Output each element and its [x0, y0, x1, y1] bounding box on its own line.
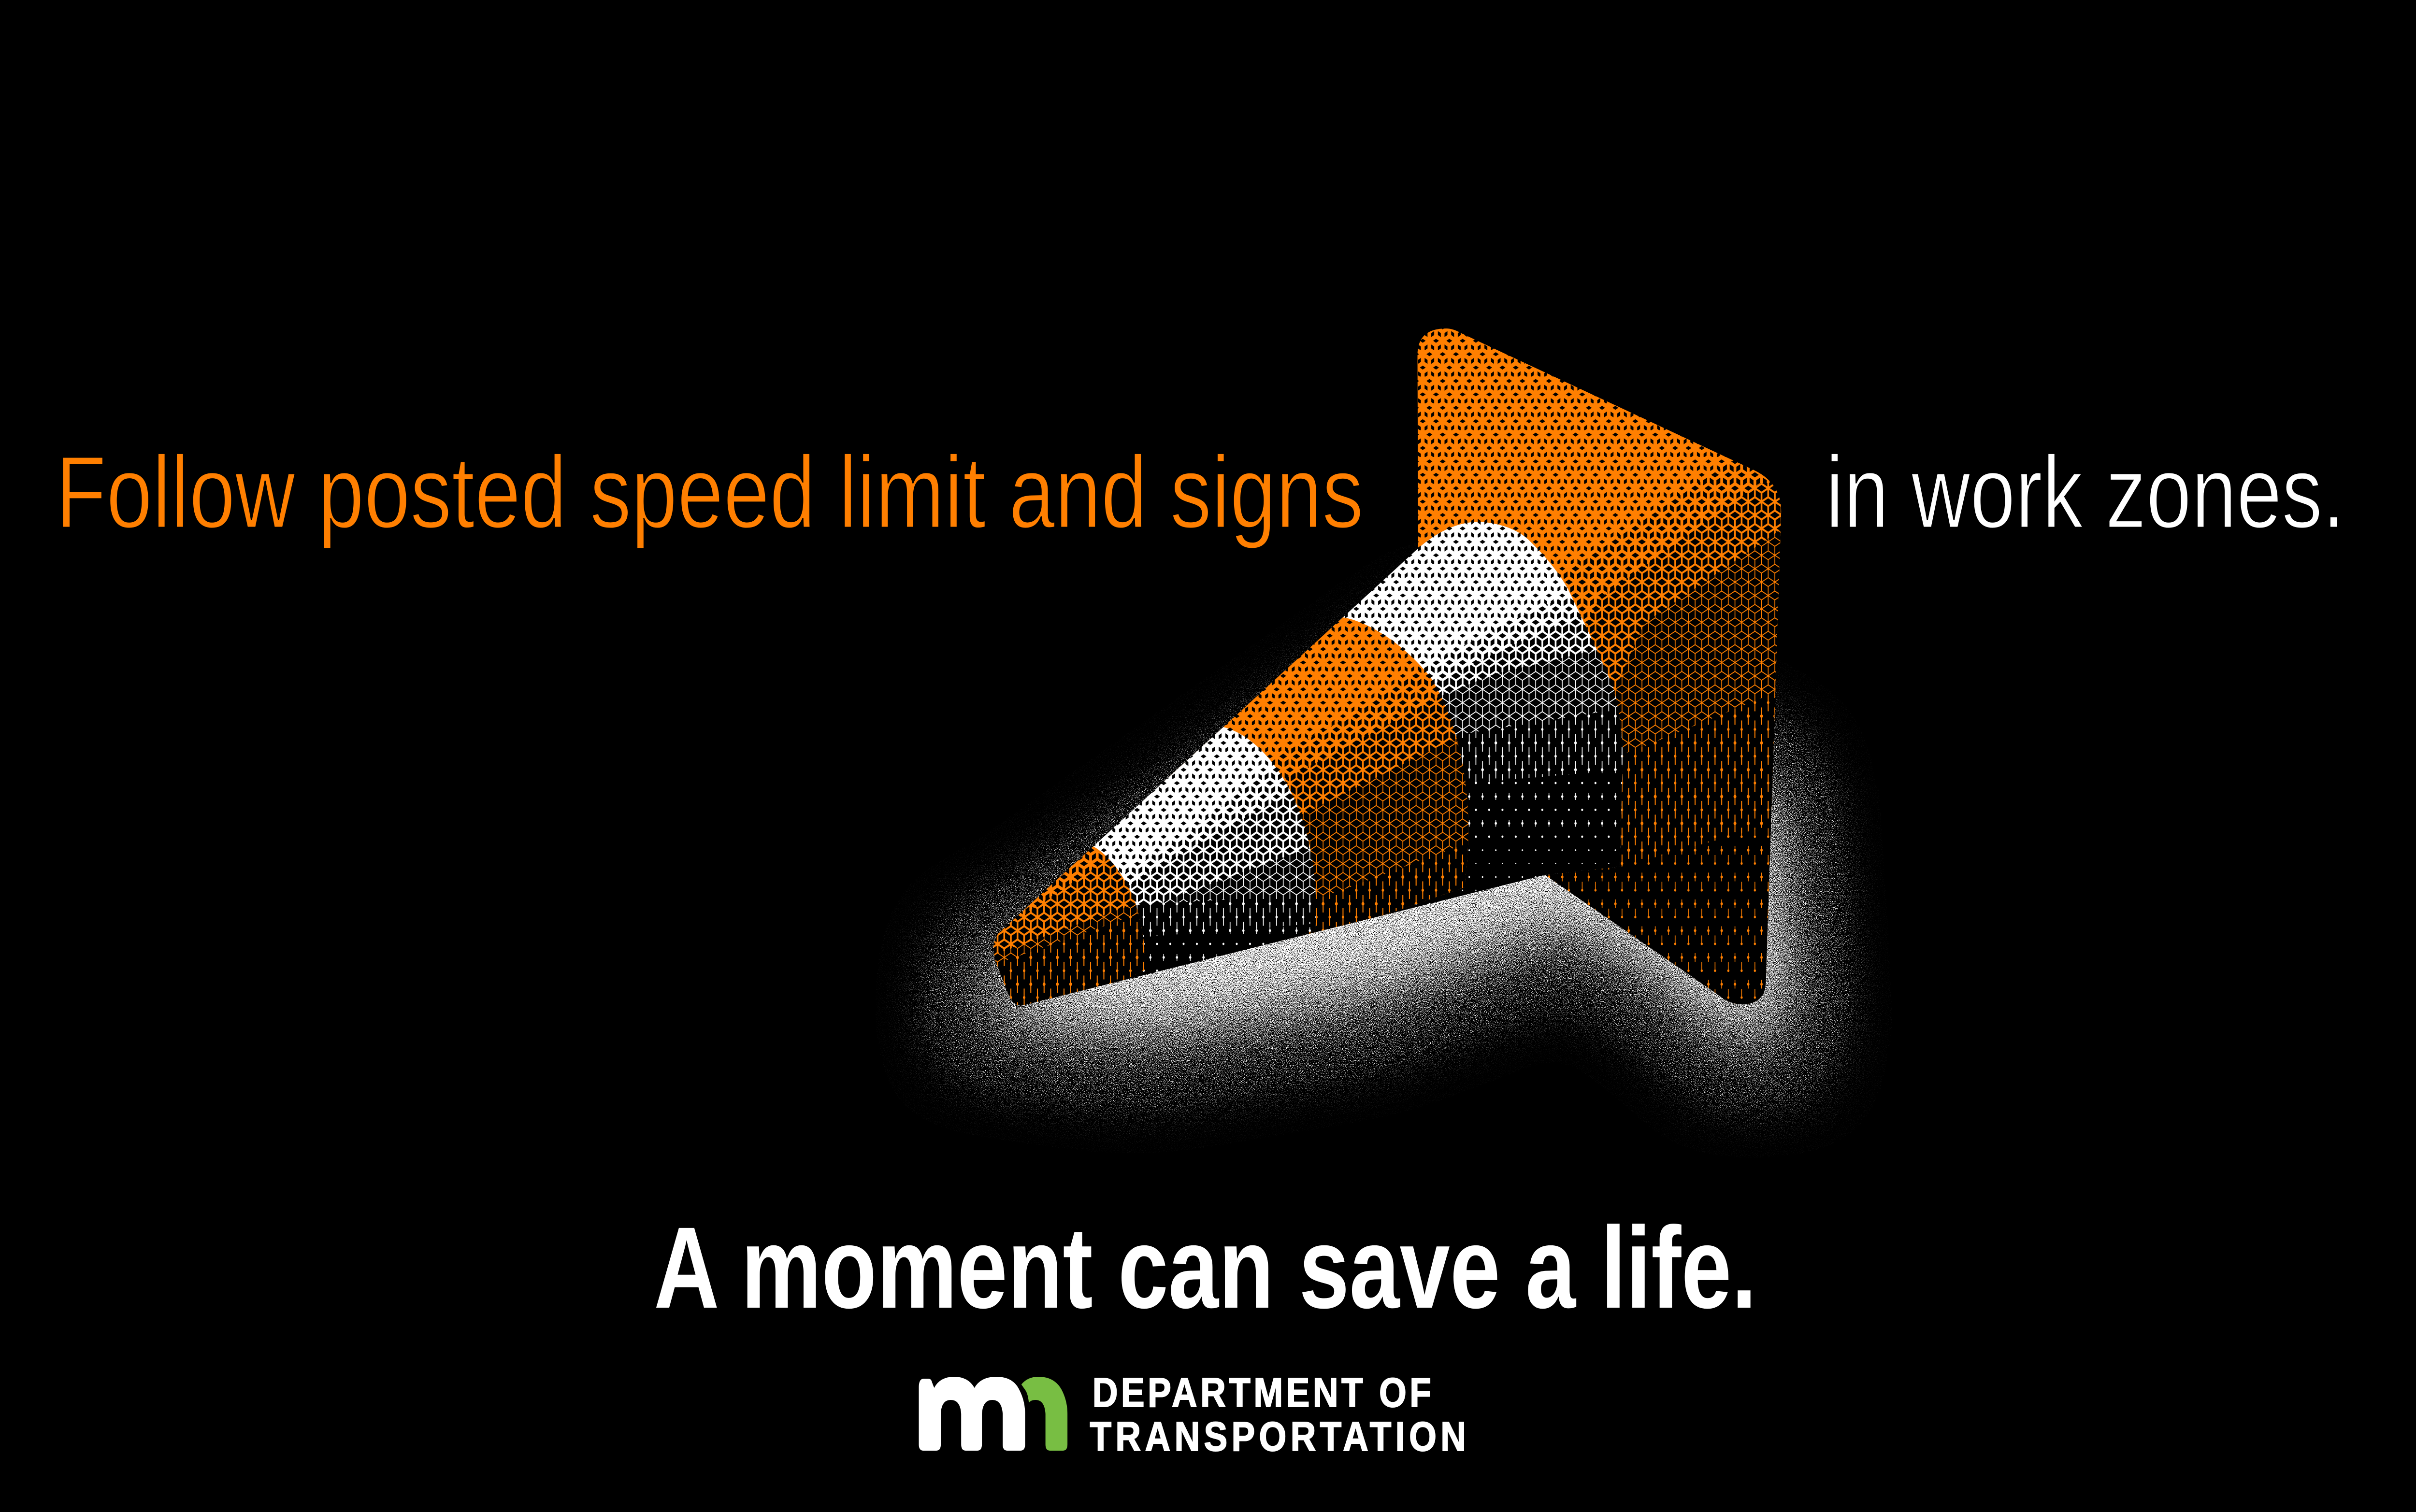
cone body bands	[993, 522, 1623, 1006]
logo mark: white m	[919, 1377, 1025, 1451]
logo wordmark line 2: TRANSPORTATION	[1090, 1413, 1466, 1459]
lower white band	[1038, 727, 1316, 1001]
logo mark: green n arm	[1021, 1377, 1067, 1451]
heading right: white line: in work zones.	[1826, 435, 2345, 549]
orange band	[1164, 617, 1468, 966]
cone back panel base	[1411, 324, 1785, 1014]
icon: fallen traffic cone	[993, 328, 1781, 1006]
heading left: orange line: Follow posted speed limit and signs	[56, 435, 1364, 549]
top white band	[1329, 522, 1623, 928]
logo: Minnesota Department of Transportation	[919, 1369, 1466, 1459]
orange cone tip	[993, 846, 1145, 1006]
speckled glow shadow under cone	[789, 483, 1951, 1208]
logo wordmark line 1: DEPARTMENT OF	[1093, 1369, 1431, 1415]
tagline: A moment can save a life.	[654, 1203, 1757, 1332]
infographic canvas	[63, 328, 2337, 1452]
